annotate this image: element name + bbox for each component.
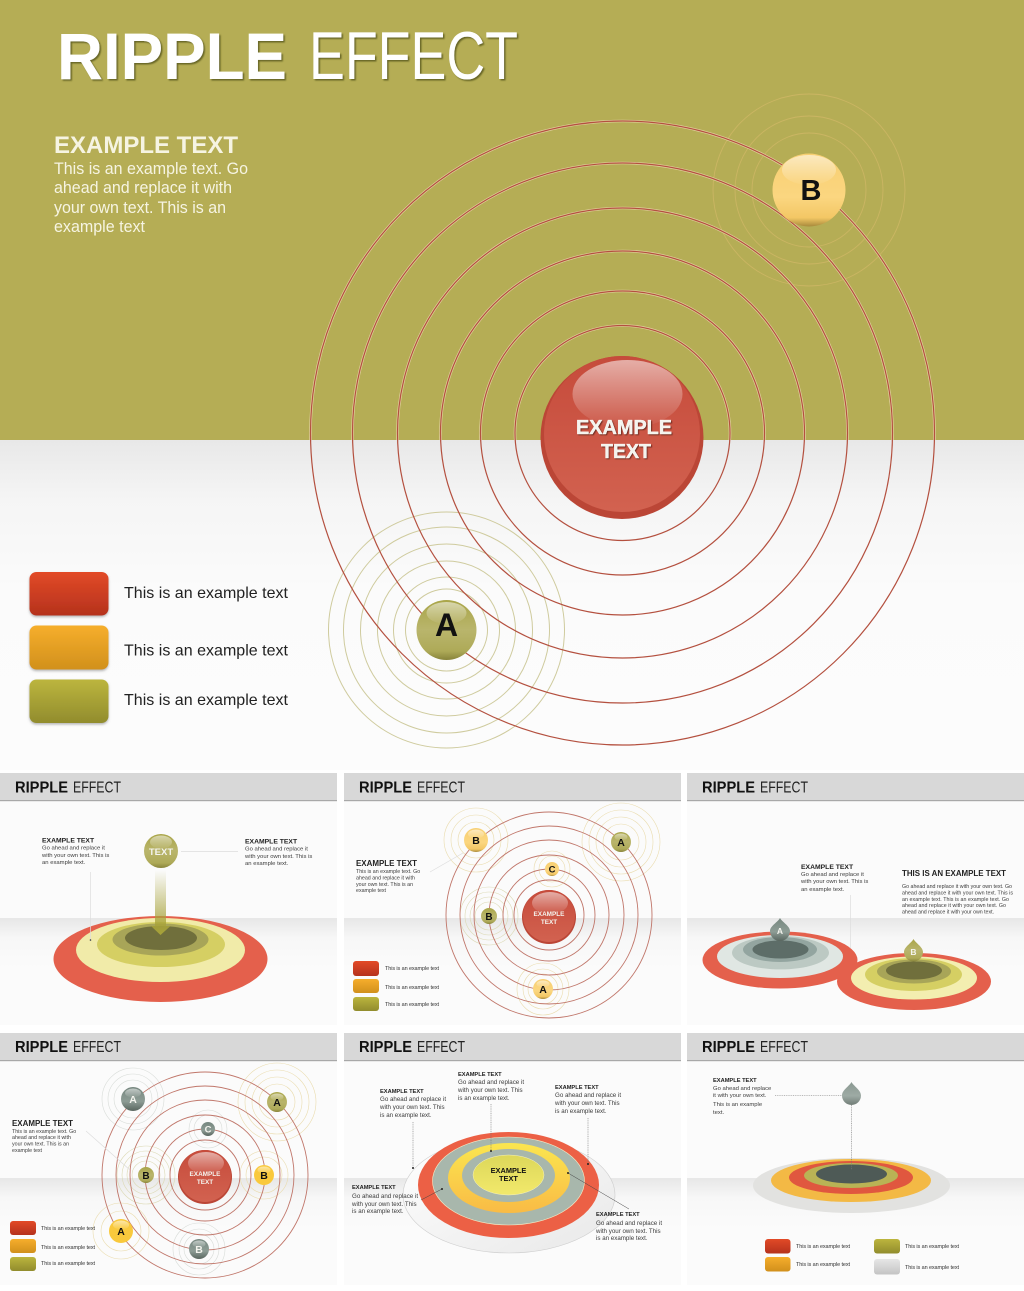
callout left: an example text. [42,860,86,866]
node B yellow: B [260,1170,268,1182]
center sphere: example text: TEXT [601,440,651,463]
center sphere: example text [540,356,704,519]
callout: EXAMPLE TEXT [12,1118,74,1128]
text block: example text: ahead and replace it with [54,179,232,197]
panel 2 background [344,801,681,1025]
callout A: EXAMPLE TEXT [801,864,854,871]
dashed leaders [775,1096,852,1170]
callout A: Go ahead and replace it [801,872,864,878]
disc A [702,932,858,988]
center sphere: TEXT [541,919,557,926]
callout 1: EXAMPLE TEXT [380,1089,424,1095]
main panel background [0,0,1024,770]
node B: B [801,175,821,207]
panel 2 header: RIPPLE [359,780,412,796]
callout 4: is an example text. [352,1208,404,1215]
main concentric ripple rings [310,121,934,745]
callout 5 [595,1212,662,1242]
center sphere: EXAMPLE [534,911,565,918]
legend [30,572,289,723]
callout: example text [12,1148,43,1154]
node C gray: C [205,1124,212,1136]
panel 3 header: RIPPLE [702,780,755,796]
node B gray [189,1239,209,1259]
legend: This is an example text [41,1245,95,1251]
callout 3 [554,1085,621,1115]
legend: This is an example text [41,1226,95,1232]
leader lines [412,1104,629,1209]
drop B: B [910,947,917,957]
panel 3 header: EFFECT [760,780,808,796]
text block: example text [54,132,248,236]
node A olive: A [617,837,625,849]
panel 6 header: EFFECT [760,1039,808,1056]
node A gray [121,1087,145,1111]
node C gray [201,1122,215,1136]
small ripples [444,803,660,1015]
node B olive: B [485,912,493,923]
callout: Go ahead and replace [713,1086,772,1092]
callout: your own text. This is an [356,882,413,888]
legend item orange [30,626,289,670]
drop A [770,918,790,941]
callout right [244,838,312,867]
node C yellow: C [549,864,556,876]
orbit rings [446,812,652,1018]
callout A: with your own text. This is [800,879,868,885]
legend item olive [30,680,289,723]
panel 5 background [344,1061,681,1285]
callout: example text [356,888,387,894]
node C yellow [545,862,559,876]
legend: This is an example text [905,1244,959,1250]
node A olive: A [273,1097,281,1109]
panel 3 header [687,773,1024,801]
node A gray: A [129,1094,137,1106]
panel 2 header: EFFECT [417,780,465,796]
callout left [41,838,109,866]
node A yellow [109,1219,133,1243]
callout 2: with your own text. This [457,1087,523,1094]
concentric disc [54,916,268,1002]
panel 4: ripple orbit variant [0,1033,337,1285]
leader lines [90,852,238,941]
callout 3: is an example text. [555,1108,607,1115]
legend item orange: This is an example text [124,642,289,660]
panel 6 background [687,1061,1024,1285]
panel 2: ripple orbit [344,773,681,1025]
node A yellow: A [117,1226,125,1238]
callout: This is an example text. Go [356,869,420,875]
layered disc [403,1132,615,1253]
panel 4 background [0,1061,337,1285]
callout: EXAMPLE TEXT [356,858,418,868]
callout [356,853,463,894]
legend [10,1221,95,1271]
text block: example text: This is an example text. Go [54,160,248,178]
panel 5: ripple layers with callouts [344,1033,681,1285]
callout 4: with your own text. This [351,1201,417,1208]
node B olive [481,908,497,924]
text block: example text: EXAMPLE TEXT [54,132,238,159]
callout 1 [379,1089,446,1119]
callout right: with your own text. This is [244,854,312,860]
callout left: EXAMPLE TEXT [42,838,95,844]
callout 2: Go ahead and replace it [458,1079,524,1086]
callout [12,1118,130,1170]
callout: EXAMPLE TEXT [713,1078,757,1084]
callout 4 [351,1185,418,1215]
ripple rings: node A small ripples [328,512,564,748]
layered disc: EXAMPLE [491,1166,526,1175]
callout [713,1078,772,1116]
legend: This is an example text [796,1244,850,1250]
main title: RIPPLE [57,19,287,93]
callout B: THIS IS AN EXAMPLE TEXT [902,868,1007,878]
legend: This is an example text [385,985,439,991]
callout: This is an example [713,1102,763,1108]
node TEXT: TEXT [149,847,173,858]
panel 1 header [0,773,337,801]
node A yellow [533,979,553,999]
panel 5 header [344,1033,681,1061]
legend: This is an example text [905,1265,959,1271]
callout A [800,864,868,893]
callout B: Go ahead and replace it with your own text. Go [902,884,1012,890]
text block: example text: example text [54,218,145,236]
callout B: ahead and replace it with your own text. [902,910,994,916]
center sphere: EXAMPLE [190,1171,221,1178]
panel 2 header [344,773,681,801]
legend: This is an example text [796,1262,850,1268]
callout B: ahead and replace it with your own text. This is [902,890,1013,896]
panel 6 header [687,1033,1024,1061]
callout A: an example text. [801,887,845,893]
layered disc: TEXT [499,1174,518,1183]
legend item olive: This is an example text [124,692,289,709]
callout B [902,868,1013,916]
node A [416,600,476,660]
legend: This is an example text [41,1261,95,1267]
callout left: Go ahead and replace it [42,846,105,852]
node B gray: B [195,1244,203,1256]
small ripples [93,1063,316,1275]
callout: it with your own text. [713,1093,767,1099]
drop A: A [777,926,783,936]
callout B: an example text. This is an example text. Go [902,897,1009,903]
panel 4 header [0,1033,337,1061]
node B olive: B [142,1171,150,1182]
callout 5: with your own text. This [595,1228,661,1235]
legend item red [30,572,289,616]
center sphere: example text: EXAMPLE [576,416,672,439]
arrow [151,870,170,935]
center sphere [522,890,576,944]
callout 1: with your own text. This [379,1104,445,1111]
text block: example text: your own text. This is an [54,199,226,217]
ripple rings: node B small ripples [713,94,905,286]
main title: EFFECT [309,18,518,94]
legend item red: This is an example text [124,585,289,602]
panel 6: drop and ripple [687,1033,1024,1285]
callout 2 [457,1072,524,1102]
node B yellow [464,828,488,852]
callout 5: Go ahead and replace it [596,1220,662,1227]
callout: ahead and replace it with [12,1135,71,1141]
node A olive [611,832,631,852]
panel 5 header: RIPPLE [359,1039,412,1056]
callout 5: is an example text. [596,1235,648,1242]
node A: A [435,607,458,643]
callout right: an example text. [245,861,289,867]
node A olive [267,1092,287,1112]
ripple disc [753,1158,950,1213]
callout: ahead and replace it with [356,876,415,882]
panel 3 background [687,801,1024,1025]
panel 1 background [0,801,337,1025]
callout: text. [713,1110,724,1116]
panel 3: two ripple discs [687,773,1024,1025]
callout 1: Go ahead and replace it [380,1096,446,1103]
callout 2: is an example text. [458,1095,510,1102]
panel 4 header: RIPPLE [15,1039,68,1056]
callout 3: EXAMPLE TEXT [555,1085,599,1091]
leader line [850,895,852,948]
node B [772,154,846,226]
callout 4: EXAMPLE TEXT [352,1185,396,1191]
callout 3: with your own text. This [554,1100,620,1107]
legend: This is an example text [385,966,439,972]
callout: This is an example text. Go [12,1129,76,1135]
center sphere [178,1150,232,1204]
node B yellow [254,1165,274,1185]
main title [57,18,518,94]
node A yellow: A [539,984,547,996]
panel 1: ripple disc with arrow [0,773,337,1025]
panel 1 header: RIPPLE [15,780,68,796]
node B olive [138,1167,154,1183]
callout 5: EXAMPLE TEXT [596,1212,640,1218]
node B yellow: B [472,835,480,847]
center sphere: TEXT [197,1179,213,1186]
disc B [837,953,991,1010]
callout: your own text. This is an [12,1142,69,1148]
panel 5 header: EFFECT [417,1039,465,1056]
callout left: with your own text. This is [41,853,109,859]
panel 1 header: EFFECT [73,780,121,796]
callout 3: Go ahead and replace it [555,1092,621,1099]
callout right: Go ahead and replace it [245,846,308,852]
callout 1: is an example text. [380,1112,432,1119]
orbit rings [102,1072,308,1278]
node TEXT [144,834,178,868]
callout 2: EXAMPLE TEXT [458,1072,502,1078]
panel 4 header: EFFECT [73,1039,121,1056]
legend [765,1239,959,1274]
callout right: EXAMPLE TEXT [245,838,298,846]
legend [353,961,439,1011]
drop B [904,939,923,962]
legend: This is an example text [385,1002,439,1008]
panel 6 header: RIPPLE [702,1039,755,1056]
callout B: ahead and replace it with your own text. Go [902,903,1006,909]
callout 4: Go ahead and replace it [352,1193,418,1200]
drop [842,1082,861,1105]
